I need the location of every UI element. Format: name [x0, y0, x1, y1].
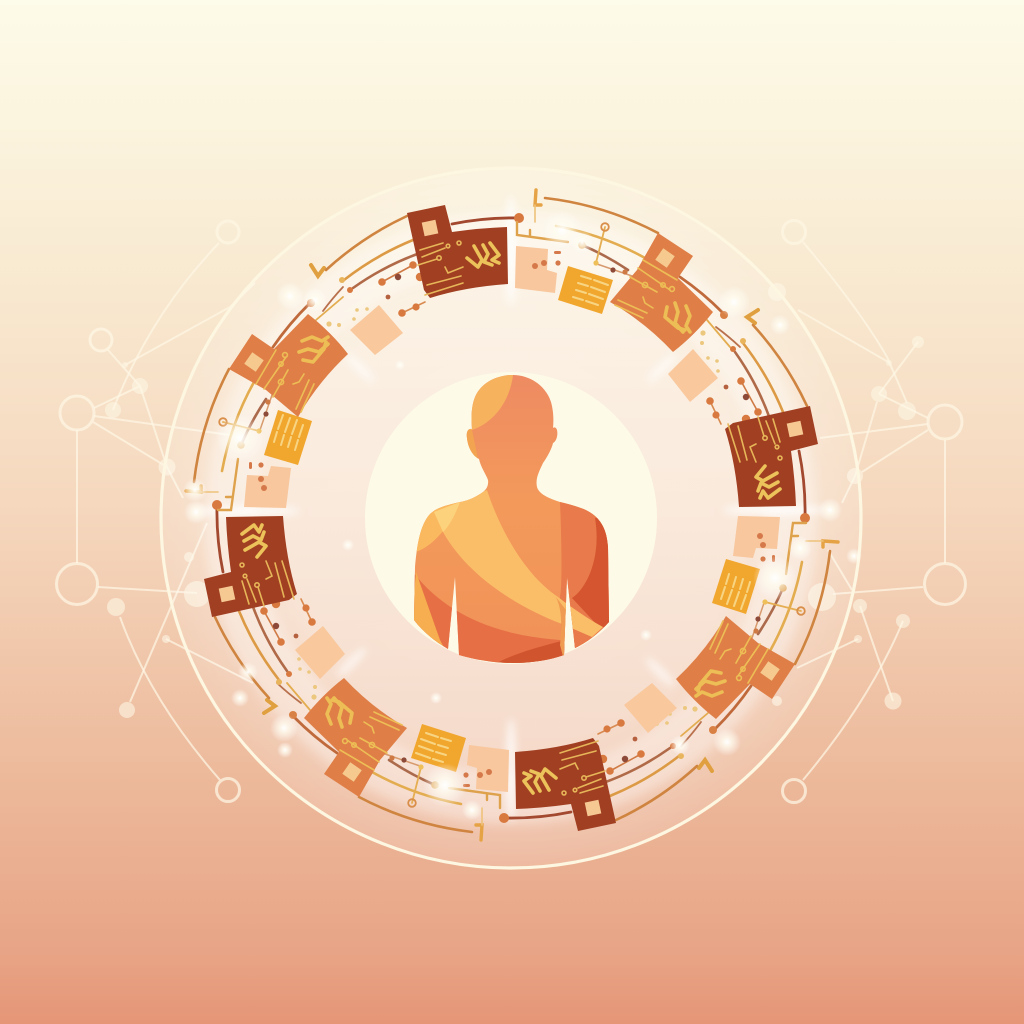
sector: upper-right orange block	[517, 190, 740, 373]
right dark panel	[572, 518, 609, 628]
panel: upper-right peach diamond	[668, 349, 718, 402]
sector: right peach and yellow panels	[712, 516, 780, 614]
lower hem shade	[498, 640, 565, 663]
central monk figure	[414, 375, 609, 663]
sector: top peach and yellow panels	[515, 246, 613, 314]
network: right constellation	[768, 220, 966, 802]
sector: lower-right orange block	[655, 523, 838, 746]
inner light field of the ring	[161, 168, 861, 868]
diagonal sash	[434, 490, 603, 637]
panel: lower-left peach diamond	[295, 626, 345, 679]
network: left constellation	[56, 221, 255, 802]
panel: upper-left peach diamond	[350, 305, 403, 355]
outer ring	[161, 168, 861, 868]
lower left robe	[414, 574, 589, 663]
left yellow panel	[414, 572, 444, 646]
shoulder yellow panel	[416, 502, 460, 552]
sector: upper-left orange block	[186, 287, 369, 510]
pale circuit band	[231, 238, 791, 798]
sector: bottom peach and yellow panels	[411, 724, 509, 792]
sparkle glows	[183, 210, 862, 820]
sector: left dark block	[204, 500, 316, 713]
soft glow streaks	[196, 195, 827, 822]
sector: top dark block	[311, 205, 524, 317]
sector: right dark block	[706, 310, 818, 523]
right robe panel	[560, 502, 609, 648]
sector: left peach and yellow panels	[244, 410, 312, 508]
central disc	[365, 372, 657, 664]
sector: lower-left orange block	[277, 657, 500, 840]
panel: lower-right peach diamond	[624, 683, 677, 733]
sector: bottom dark block	[499, 719, 712, 831]
head highlight	[468, 375, 513, 430]
